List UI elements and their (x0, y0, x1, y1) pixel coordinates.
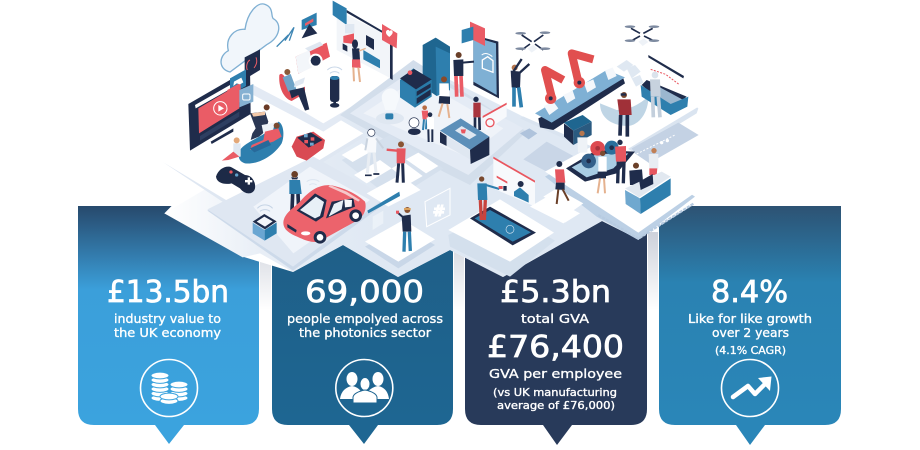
caption: people employed: the photonics sector (299, 325, 432, 340)
interface panel with face (493, 157, 535, 207)
stat: £76,400 (487, 330, 624, 381)
robot and man (365, 129, 406, 183)
caption: people employed (287, 311, 443, 340)
panel: people employed (272, 206, 453, 444)
icon: coins (140, 360, 198, 416)
woman in white (439, 76, 450, 118)
camera (296, 42, 330, 74)
desk with hologram (440, 118, 489, 164)
stat: £76,400: £76,400 (487, 330, 624, 365)
VR person (396, 207, 411, 252)
caption: UK manufacturing comparison (493, 387, 617, 412)
platform base (130, 0, 733, 277)
woman and blue tile (473, 97, 507, 131)
panel: industry value (78, 206, 259, 444)
isometric platform illustration (130, 0, 733, 277)
caption: industry value (114, 311, 222, 340)
stat: 69,000: 69,000 (305, 275, 424, 310)
stat: 8.4% (688, 275, 812, 357)
man and woman with gears on phone (566, 131, 635, 193)
smart speaker (327, 67, 342, 108)
icon: smart hub cube (253, 205, 277, 241)
icon: growth arrow (722, 360, 778, 416)
white steps by walker (533, 188, 583, 223)
caption: like for like growth: (4.1% CAGR) (715, 345, 786, 357)
red car (283, 185, 366, 244)
gray plate with dots (632, 123, 699, 167)
caption: industry value: the UK economy (114, 325, 222, 340)
stat: £13.5bn (107, 275, 229, 340)
stat: 8.4%: 8.4% (711, 275, 788, 310)
plate: VR person (365, 220, 435, 268)
drones (515, 25, 659, 53)
caption: industry value: industry value to (114, 311, 221, 326)
plate: robot line zone (520, 50, 698, 163)
pillars between panels (260, 232, 658, 310)
blue bar by car (367, 192, 400, 230)
server racks (564, 115, 592, 145)
floating media tiles (227, 49, 260, 108)
people on beanbag (222, 104, 283, 164)
stat: 69,000 (287, 275, 443, 340)
plate: desk and phone zone (545, 137, 695, 240)
lower plate front edge (598, 203, 694, 239)
caption: UK manufacturing comparison: average of £76,000) (497, 400, 615, 412)
man raising arms (511, 59, 529, 107)
caption: people employed: people empolyed across (287, 311, 443, 326)
conveyor belt with robot arms (535, 53, 625, 130)
android at console (641, 55, 688, 117)
man at phone screen (453, 52, 474, 97)
icon: people (336, 360, 393, 416)
caption: GVA per employee: GVA per employee (489, 366, 622, 381)
plate: central steps (342, 135, 443, 207)
stat: £13.5bn: £13.5bn (107, 275, 229, 310)
game controller (216, 167, 255, 193)
hologram screens with VR man (600, 92, 648, 137)
panel: like for like growth (659, 206, 841, 445)
caption: like for like growth (688, 311, 812, 357)
icon: hash window: # (433, 202, 446, 220)
reception desk with staff (625, 148, 671, 214)
panel: GVA (465, 206, 647, 445)
stacked boxes (617, 60, 643, 87)
red device (292, 132, 325, 161)
gray tiles centre (520, 128, 573, 172)
plate: car zone (207, 157, 390, 271)
fridge and oven (400, 38, 450, 108)
bearded man by car (289, 171, 319, 211)
floating image tile (277, 13, 317, 47)
plate: camera and speaker zone (250, 33, 407, 132)
caption: like for like growth: Like for like growth (688, 311, 812, 326)
caption: UK manufacturing comparison: (vs UK manufacturing (493, 387, 617, 399)
cloud (221, 4, 279, 72)
plate: smart home zone (340, 60, 527, 185)
light bulb (376, 88, 404, 124)
family with robot vacuum (408, 105, 434, 142)
icon: hash window (425, 188, 450, 227)
caption: total GVA: total GVA (521, 311, 590, 326)
caption: like for like growth: over 2 years (712, 325, 789, 340)
social screen with woman (333, 1, 397, 82)
plate: phone base (448, 196, 578, 277)
smart TV (188, 68, 251, 151)
smartphone with man (470, 176, 536, 245)
plate: game and TV zone (163, 87, 363, 213)
stat: £5.3bn: £5.3bn (500, 275, 611, 310)
smartphone home screen (462, 22, 499, 98)
walking woman (555, 161, 569, 204)
stat: £5.3bn (500, 275, 611, 326)
person in red chair (279, 69, 309, 111)
